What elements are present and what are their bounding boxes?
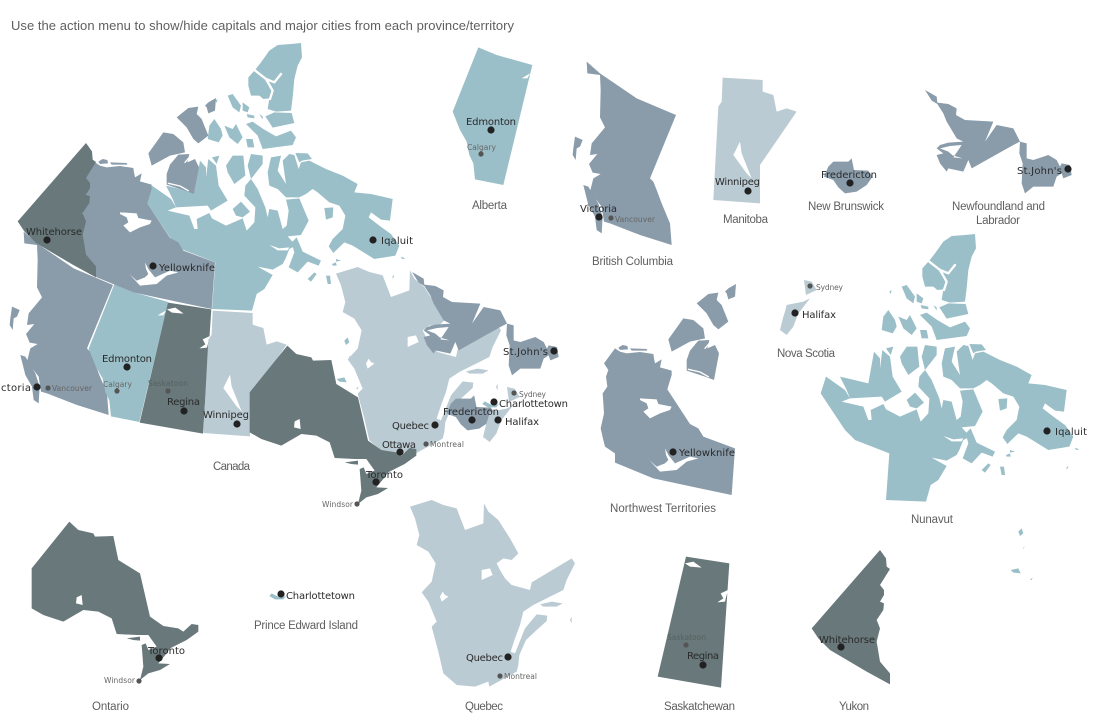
map: Canada: Windsor [322,500,354,509]
title: Use the action menu to show/hide capitals and major cities from each province/territory [11,18,514,33]
panel: Ontario [32,522,198,713]
panel: British Columbia [573,62,676,268]
map: Canada: Sydney [519,390,547,399]
map: Canada: Quebec [392,421,429,432]
panel: British Columbia: Victoria [580,204,617,215]
panel: Nova Scotia [777,280,844,360]
panel: Newfoundland and Labrador [925,90,1072,227]
panel: Northwest Territories [601,284,736,515]
map: Canada: Toronto [365,470,403,481]
label: Prince Edward Island: Prince Edward Island [254,620,358,632]
map: Canada: Regina [167,397,200,408]
map: Canada: Yellowknife [158,263,215,274]
panel: Nova Scotia: Halifax [802,310,836,321]
map: Canada: Charlottetown [499,399,568,410]
panel: Manitoba [713,78,797,226]
panel: Quebec: Quebec [466,653,503,664]
label: British Columbia: British Columbia [592,256,674,268]
panel: Nunavut: Iqaluit [1055,427,1087,438]
map: Canada: Ottawa [382,440,416,451]
label: Nova Scotia: Nova Scotia [777,348,836,360]
map: Canada: Calgary [103,380,133,389]
panel: Nunavut [821,234,1087,580]
panel: Ontario: Windsor [104,676,136,685]
label: Canada: Canada [213,461,251,473]
panel: Ontario: Toronto [147,646,185,657]
label: Manitoba: Manitoba [723,214,769,226]
map: Canada: Montreal [430,440,464,449]
map: Canada: Winnipeg [203,410,249,421]
label: Ontario: Ontario [92,701,129,713]
label: New Brunswick: New Brunswick [808,201,884,213]
panel: Saskatchewan: Saskatoon [667,633,706,642]
map: Canada [0,43,568,509]
label: Newfoundland and Labrador: Newfoundland and [952,201,1045,213]
label: Quebec: Quebec [465,701,503,713]
panel: Saskatchewan [658,557,735,713]
map: Canada: Iqaluit [381,236,413,247]
label: Yukon: Yukon [839,701,869,713]
label: Northwest Territories: Northwest Territories [610,503,716,515]
map: Canada: Saskatoon [148,379,188,388]
label: Nunavut: Nunavut [911,514,954,526]
panel: Manitoba: Winnipeg [715,177,760,188]
map: Canada: St.John's [503,347,548,358]
panel: Prince Edward Island [254,590,358,632]
panel: New Brunswick [808,158,884,213]
panel: Alberta: Calgary [467,143,497,152]
panel: Quebec: Montreal [504,672,537,681]
map: Canada: Whitehorse [26,227,82,238]
label: Saskatchewan: Saskatchewan [664,701,735,713]
panel: Yukon: Whitehorse [819,635,875,646]
panel: Alberta [453,47,532,212]
panel: Alberta: Edmonton [466,117,516,128]
map: Canada: Fredericton [443,407,499,418]
panel: New Brunswick: Fredericton [821,170,877,181]
panel: Saskatchewan: Regina [687,651,719,662]
panel: Newfoundland and Labrador: St.John's [1017,166,1062,177]
map: Canada: Vancouver [52,384,93,393]
panel: Northwest Territories: Yellowknife [678,448,735,459]
panel: Prince Edward Island: Charlottetown [286,591,355,602]
panel: Yukon [812,550,890,713]
panel: Quebec [410,500,575,713]
panel: Nova Scotia: Sydney [816,283,844,292]
panel: British Columbia: Vancouver [615,215,656,224]
map: Canada: Edmonton [102,354,152,365]
map: Canada: Halifax [505,417,539,428]
label: Newfoundland and Labrador: Labrador [976,215,1020,227]
label: Alberta: Alberta [472,200,508,212]
